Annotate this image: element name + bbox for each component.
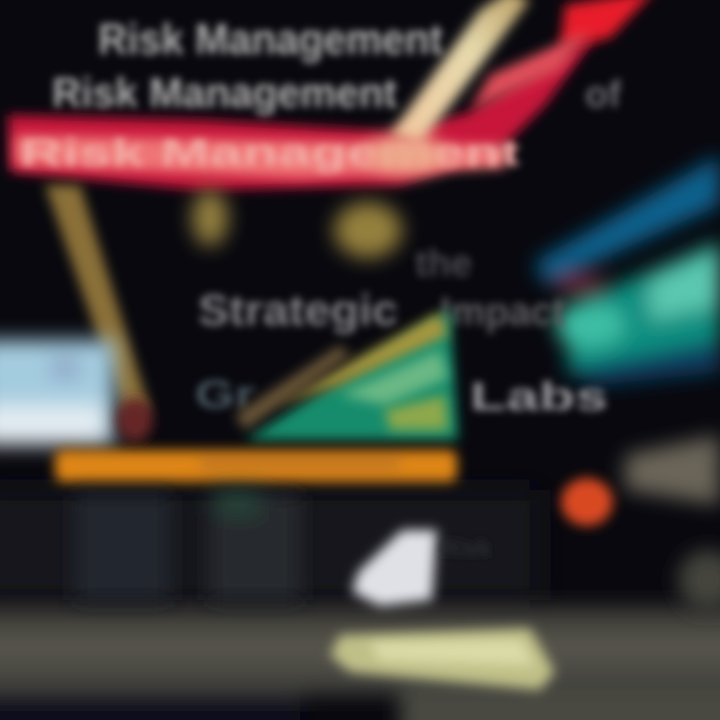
banner text: Risk Management (20, 132, 520, 173)
tan icon: round (334, 202, 402, 258)
blob under arrow (365, 137, 445, 173)
heading: of (585, 74, 621, 116)
white icon (352, 530, 437, 606)
heading: Risk Management (98, 15, 443, 64)
left light-blue panel (0, 340, 115, 445)
body text: Impact (440, 290, 565, 334)
tan diagonal bar (45, 185, 150, 415)
body text: Strategic (198, 286, 398, 335)
body text: the (415, 243, 472, 285)
red banner (8, 0, 655, 190)
red marker (117, 398, 153, 442)
body text: Gr (195, 373, 255, 417)
heading: Risk Management (52, 69, 397, 116)
body text (195, 243, 608, 419)
right beige shape (625, 435, 720, 610)
orange dot (561, 478, 613, 526)
teal and blue panel (535, 155, 720, 385)
area chart: green triangle (235, 310, 458, 440)
floor band (0, 605, 720, 720)
small caption: Risk (440, 535, 491, 562)
heading (52, 15, 621, 116)
tan icon: small (192, 190, 228, 246)
body text: Labs (470, 375, 608, 419)
cream book on floor (330, 628, 555, 690)
lower columns (75, 490, 300, 600)
orange bar (55, 450, 457, 482)
rising cream arrow (390, 0, 530, 145)
